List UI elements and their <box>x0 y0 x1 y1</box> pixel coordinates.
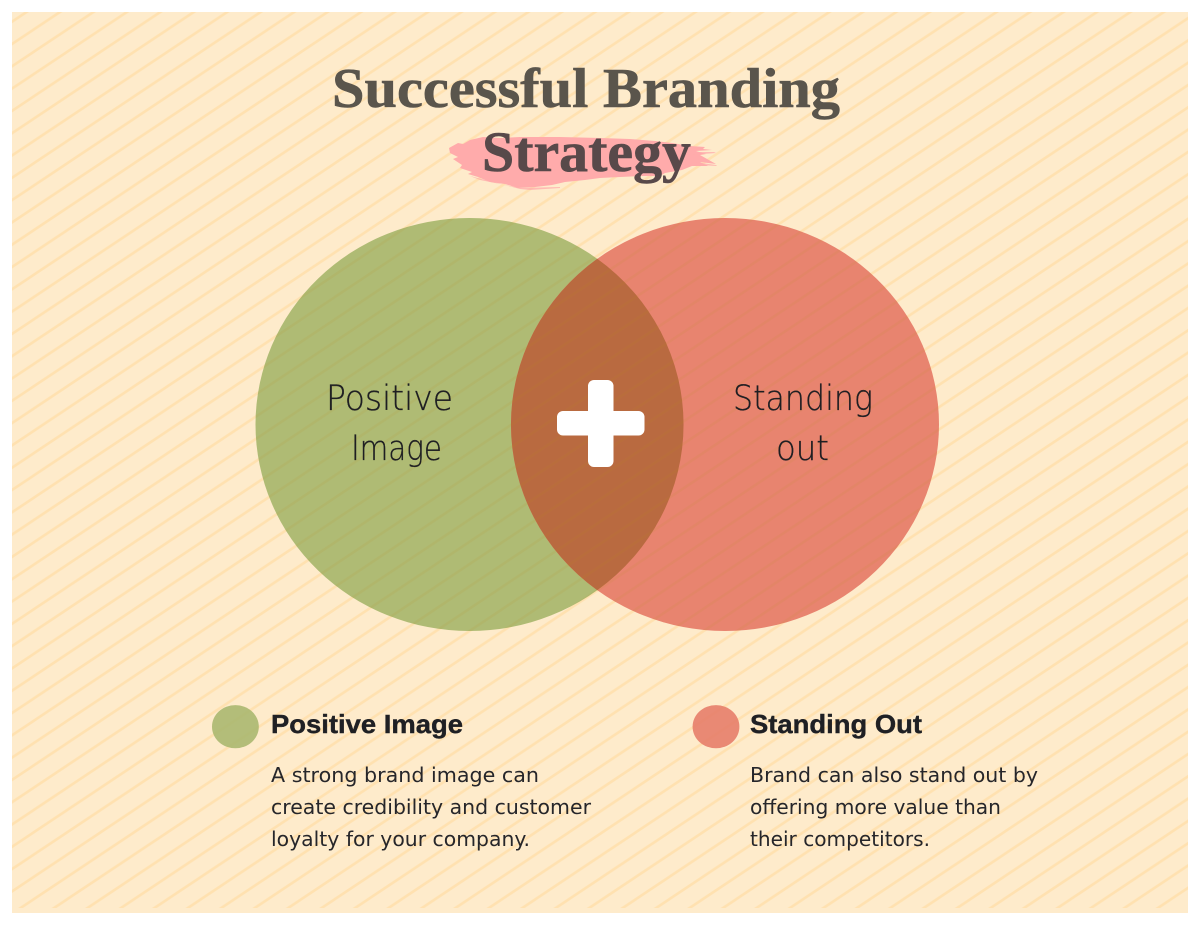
legend: standing out <box>693 705 1038 851</box>
legend: positive image <box>212 705 592 851</box>
brush stroke behind Strategy <box>449 137 717 190</box>
label: positive image: Positive <box>326 379 453 419</box>
label: positive image: Image <box>351 429 442 469</box>
label: standing out: out <box>776 429 829 469</box>
legend description: their competitors. <box>750 827 930 851</box>
legend description: offering more value than <box>750 795 1001 819</box>
legend description: A strong brand image can <box>271 763 539 787</box>
legend description: Brand can also stand out by <box>750 763 1038 787</box>
legend description <box>750 763 1038 851</box>
venn diagram <box>256 218 939 631</box>
label: positive image <box>326 379 453 469</box>
circle: standing out <box>511 218 939 631</box>
legend description <box>271 763 592 851</box>
overlap region <box>511 259 684 590</box>
legend dot: green <box>212 705 259 748</box>
legend heading: Positive Image <box>271 709 463 739</box>
legend dot: red <box>693 705 739 748</box>
title: Strategy <box>482 121 691 184</box>
stripes showing through circles <box>256 218 721 631</box>
title <box>332 58 840 184</box>
icon: plus <box>557 380 644 467</box>
title: Successful Branding <box>332 58 840 120</box>
label: standing out: Standing <box>733 379 873 419</box>
legend description: create credibility and customer <box>271 795 592 819</box>
legend heading: Standing Out <box>750 709 922 739</box>
legend description: loyalty for your company. <box>271 827 530 851</box>
label: standing out <box>733 379 873 469</box>
circle: positive image <box>256 218 684 631</box>
